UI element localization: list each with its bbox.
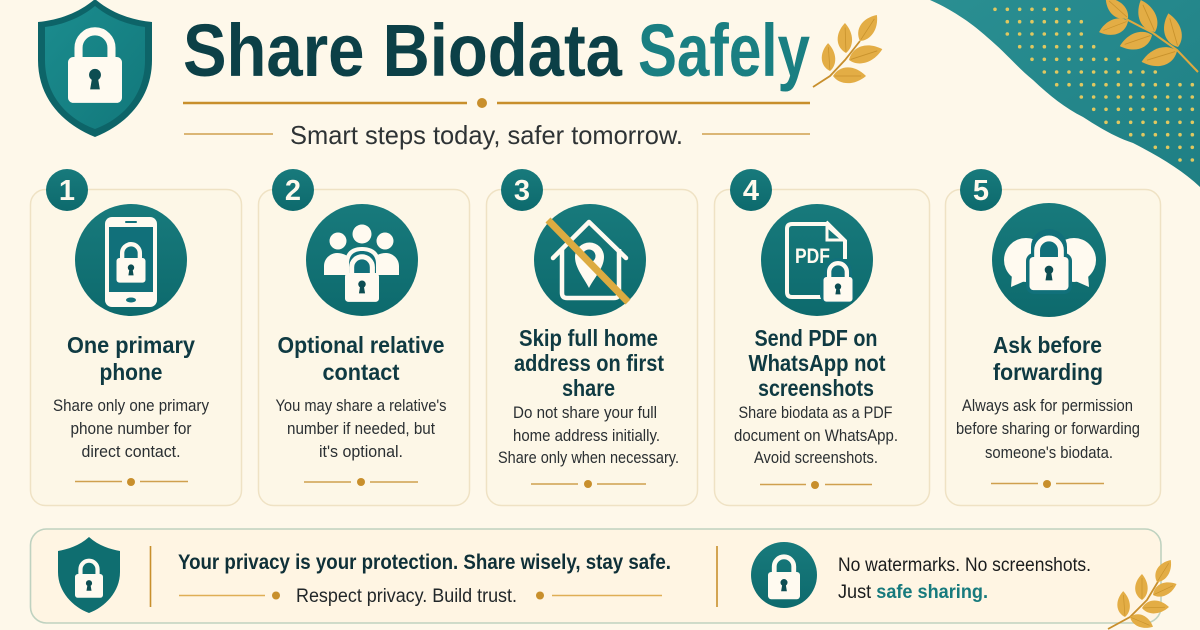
divider	[531, 480, 646, 488]
description: Share only one primary	[53, 397, 210, 415]
description: Always ask for permission	[962, 397, 1133, 415]
description: Share only when necessary.	[498, 449, 679, 467]
description: Avoid screenshots.	[754, 449, 878, 467]
panel: step 2	[258, 169, 470, 506]
description: document on WhatsApp.	[734, 427, 898, 445]
description: Share biodata as a PDF	[738, 404, 892, 422]
badge 1	[46, 169, 88, 211]
description: someone's biodata.	[985, 444, 1113, 462]
panel: step 5	[946, 169, 1160, 506]
description: Do not share your full	[513, 404, 657, 422]
title: Safely	[638, 9, 810, 92]
heading	[748, 325, 886, 401]
icon: lock circle	[751, 542, 817, 608]
description	[53, 397, 210, 461]
badge 3	[501, 169, 543, 211]
heading: Send PDF on	[754, 325, 878, 351]
title divider	[183, 98, 810, 108]
description: direct contact.	[82, 443, 180, 461]
description: it's optional.	[319, 443, 403, 461]
panel: step 3	[486, 169, 698, 506]
panel: privacy banner	[30, 529, 1161, 623]
banner message	[838, 555, 1091, 603]
icon: gold sprig bottom right	[1108, 556, 1179, 630]
description: before sharing or forwarding	[956, 420, 1140, 438]
description	[734, 404, 898, 467]
icon: people with lock	[306, 204, 418, 316]
divider	[75, 478, 188, 486]
divider	[304, 478, 418, 486]
heading: share	[562, 375, 615, 401]
divider	[760, 481, 872, 489]
heading: screenshots	[758, 375, 874, 401]
badge 3: 3	[514, 175, 530, 207]
icon: PDF document with lock	[761, 204, 873, 316]
description: You may share a relative's	[276, 397, 446, 415]
description: number if needed, but	[287, 420, 435, 438]
badge 4	[730, 169, 772, 211]
panel: step 1	[30, 169, 242, 506]
heading	[278, 332, 444, 385]
icon: phone with lock	[75, 204, 187, 316]
heading	[514, 325, 664, 401]
heading: Ask before	[993, 332, 1102, 358]
icon: PDF document with lock: PDF	[795, 245, 830, 268]
badge 5: 5	[973, 175, 989, 207]
title: Share Biodata	[183, 9, 623, 92]
badge 2: 2	[285, 175, 301, 207]
panel: step 4	[714, 169, 930, 506]
subtitle: Smart steps today, safer tomorrow.	[290, 120, 683, 150]
divider	[991, 480, 1104, 488]
banner heading: Your privacy is your protection. Share wisely, stay safe.	[178, 551, 671, 574]
icon: gold sprig beside title	[813, 11, 885, 87]
badge 2	[272, 169, 314, 211]
decorative corner blob with dots	[930, 0, 1200, 187]
heading: WhatsApp not	[748, 350, 886, 376]
description	[956, 397, 1140, 462]
heading	[67, 332, 195, 385]
description: home address initially.	[513, 427, 660, 445]
banner message: Just safe sharing.	[838, 582, 988, 603]
heading: address on first	[514, 350, 664, 376]
heading	[993, 332, 1103, 385]
badge 5	[960, 169, 1002, 211]
icon: speech bubbles with lock	[992, 203, 1106, 317]
description	[498, 404, 679, 467]
heading: phone	[100, 359, 162, 385]
icon: crossed out home with pin	[534, 204, 646, 316]
heading: forwarding	[993, 359, 1103, 385]
heading: Skip full home	[519, 325, 658, 351]
icon: small shield with lock	[58, 537, 120, 613]
description	[276, 397, 446, 461]
heading: One primary	[67, 332, 195, 358]
heading: contact	[322, 359, 400, 385]
description: phone number for	[70, 420, 192, 438]
badge 1: 1	[59, 175, 75, 207]
banner message: No watermarks. No screenshots.	[838, 555, 1091, 576]
banner subline: Respect privacy. Build trust.	[296, 586, 517, 607]
icon: main shield with lock	[38, 0, 152, 137]
heading: Optional relative	[278, 332, 444, 358]
badge 4: 4	[743, 175, 759, 207]
icon: gold sprig top right	[1097, 0, 1198, 72]
banner subline	[179, 586, 662, 607]
